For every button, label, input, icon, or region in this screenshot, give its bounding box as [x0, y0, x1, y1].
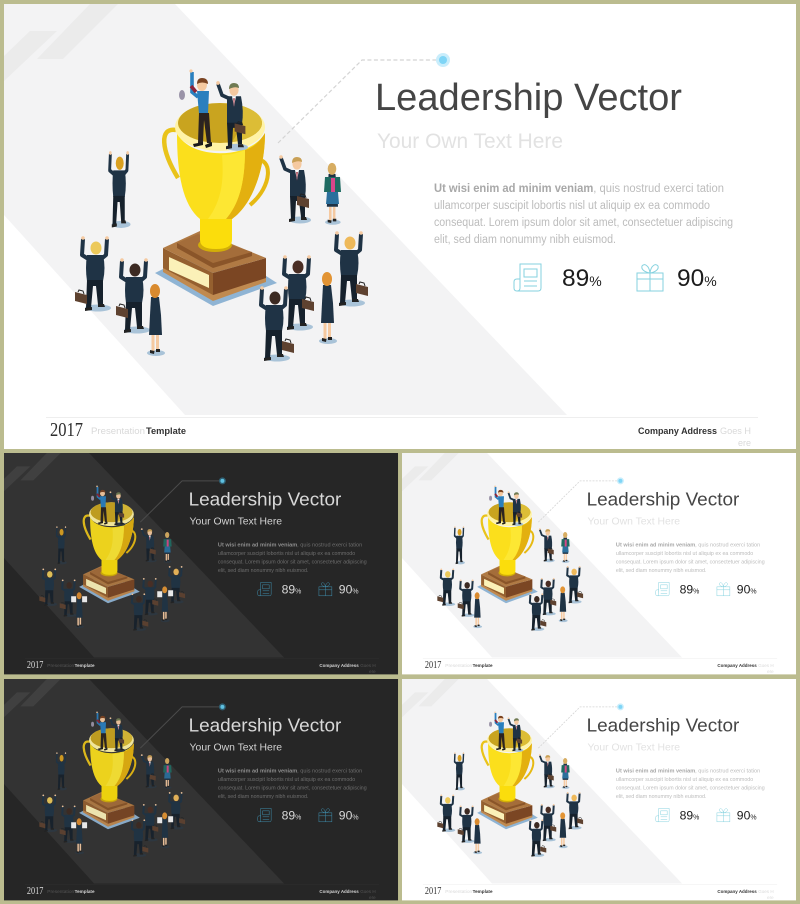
footer year: 2017	[27, 886, 43, 897]
diagonal band	[4, 4, 567, 415]
icon: newspaper	[514, 264, 541, 291]
person: woman with orange hair	[319, 272, 337, 344]
footer company address: ere	[369, 895, 376, 901]
illustration: trophy and cheering team	[75, 69, 368, 362]
footer company address: Goes H	[720, 426, 751, 437]
panel: dark slide top left	[4, 453, 398, 675]
body text: ullamcorper suscipit lobortis nisl ut aliquip ex ea commodo	[434, 200, 710, 212]
footer template label: Presentation	[445, 889, 473, 895]
footer company address: Goes H	[360, 663, 376, 669]
title: Leadership Vector	[189, 490, 341, 511]
diagonal band	[402, 453, 682, 657]
title: Leadership Vector	[375, 77, 682, 119]
body text: consequat. Lorem ipsum dolor sit amet, consectetuer adipiscing	[616, 785, 765, 791]
body text: consequat. Lorem ipsum dolor sit amet, consectetuer adipiscing	[218, 559, 367, 565]
body text: elit, sed diam nonummy nibh euismod.	[434, 234, 616, 246]
panel: light slide bottom right	[402, 679, 796, 901]
papers held by women	[71, 590, 173, 602]
footer company address: Company Address	[717, 889, 757, 895]
subtitle: Your Own Text Here	[190, 517, 282, 528]
body text: Ut wisi enim ad minim veniam, quis nostrud exerci tation	[616, 769, 760, 775]
panel: dark slide bottom left	[4, 679, 398, 901]
footer company address: ere	[767, 669, 774, 675]
footer company address	[638, 426, 751, 449]
subtitle: Your Own Text Here	[588, 517, 680, 528]
footer company address	[717, 663, 774, 675]
body text: elit, sed diam nonummy nibh euismod.	[218, 568, 309, 574]
stat: 89 percent: 89%	[680, 582, 699, 596]
slide background	[402, 453, 796, 674]
stat: 89 percent: 89%	[562, 265, 602, 292]
footer template label: Template	[75, 663, 95, 669]
slide background	[4, 4, 796, 449]
illustration	[437, 486, 583, 631]
subtitle: Your Own Text Here	[190, 743, 282, 754]
footer rule	[25, 883, 379, 886]
stat: 90 percent: 90%	[339, 808, 359, 822]
icon: gift	[637, 265, 663, 291]
connector dot	[617, 477, 624, 484]
papers held by women	[71, 816, 173, 828]
footer company address: ere	[369, 669, 376, 675]
dashed connector	[538, 481, 617, 522]
person: cheering colleague 6	[260, 286, 294, 362]
footer company address: Company Address	[717, 663, 757, 669]
subtitle: Your Own Text Here	[588, 743, 680, 754]
icon: gift	[319, 809, 332, 822]
person: leader in blue shirt with megaphone	[179, 69, 212, 148]
trophy	[155, 103, 277, 306]
footer rule	[46, 417, 758, 418]
icon: newspaper	[258, 808, 271, 822]
icon: gift	[717, 583, 730, 596]
footer year: 2017	[425, 660, 441, 671]
body text	[218, 769, 367, 800]
body text: ullamcorper suscipit lobortis nisl ut aliquip ex ea commodo	[616, 551, 753, 557]
body text: Ut wisi enim ad minim veniam, quis nostrud exerci tation	[218, 543, 362, 549]
body text: consequat. Lorem ipsum dolor sit amet, consectetuer adipiscing	[616, 559, 765, 565]
connector	[140, 707, 219, 748]
footer template label: Presentation	[445, 663, 473, 669]
title: Leadership Vector	[587, 716, 739, 737]
diagonal band	[402, 679, 682, 883]
person: cheering colleague 1	[109, 151, 131, 228]
footer template label: Presentation	[47, 889, 75, 895]
body text	[616, 769, 765, 800]
body text: Ut wisi enim ad minim veniam, quis nostrud exerci tation	[434, 183, 724, 195]
footer year: 2017	[425, 886, 441, 897]
dashed connector	[538, 707, 617, 748]
connector dot	[219, 477, 226, 484]
stat: 89 percent: 89%	[680, 808, 699, 822]
corner strips	[4, 453, 61, 491]
stat: 90 percent: 90%	[737, 808, 757, 822]
footer company address: Company Address	[319, 889, 359, 895]
stat: 89 percent: 89%	[282, 582, 301, 596]
illustration	[39, 712, 185, 857]
footer company address	[319, 663, 376, 675]
footer company address: ere	[767, 895, 774, 901]
person: cheering colleague 3	[116, 258, 150, 334]
body text: consequat. Lorem ipsum dolor sit amet, consectetuer adipiscing	[434, 217, 733, 229]
footer rule	[423, 657, 777, 660]
body text: elit, sed diam nonummy nibh euismod.	[616, 568, 707, 574]
corner strips	[4, 4, 118, 81]
person: cheering colleague 5	[283, 255, 314, 330]
footer company address	[717, 889, 774, 901]
footer template label: Template	[473, 663, 493, 669]
body text	[218, 543, 367, 574]
panel: main light slide	[4, 4, 796, 449]
person: woman with papers	[147, 284, 165, 356]
person: cheering colleague 2	[75, 236, 111, 312]
person: woman in teal	[324, 163, 341, 225]
footer company address	[319, 889, 376, 901]
stat: 90 percent: 90%	[339, 582, 359, 596]
icon: newspaper	[656, 808, 669, 822]
corner strips	[402, 453, 459, 491]
footer template label: Presentation	[91, 426, 145, 437]
body text: consequat. Lorem ipsum dolor sit amet, consectetuer adipiscing	[218, 785, 367, 791]
footer company address: Company Address	[638, 426, 717, 437]
footer year: 2017	[27, 660, 43, 671]
body text: Ut wisi enim ad minim veniam, quis nostrud exerci tation	[616, 543, 760, 549]
icon: newspaper	[656, 582, 669, 596]
stat: 90 percent: 90%	[677, 265, 717, 292]
body text: Ut wisi enim ad minim veniam, quis nostrud exerci tation	[218, 769, 362, 775]
body text: elit, sed diam nonummy nibh euismod.	[218, 794, 309, 800]
icon: gift	[717, 809, 730, 822]
subtitle: Your Own Text Here	[377, 130, 563, 153]
footer company address: Company Address	[319, 663, 359, 669]
icon: gift	[319, 583, 332, 596]
connector dot	[617, 703, 624, 710]
illustration	[437, 712, 583, 857]
body text: ullamcorper suscipit lobortis nisl ut aliquip ex ea commodo	[218, 777, 355, 783]
slide background	[4, 679, 398, 900]
diagonal band	[4, 679, 284, 883]
footer year: 2017	[50, 419, 83, 441]
title: Leadership Vector	[189, 716, 341, 737]
person: cheering colleague 4	[335, 231, 368, 306]
connector dot	[436, 53, 450, 67]
footer rule	[423, 883, 777, 886]
footer company address: Goes H	[360, 889, 376, 895]
footer company address: ere	[738, 438, 751, 449]
icon: newspaper	[258, 582, 271, 596]
footer template label: Presentation	[47, 663, 75, 669]
diagonal band	[4, 453, 284, 657]
title: Leadership Vector	[587, 490, 739, 511]
footer rule	[25, 657, 379, 660]
corner strips	[4, 679, 61, 717]
illustration	[39, 486, 185, 631]
footer company address: Goes H	[758, 663, 774, 669]
body text	[434, 183, 733, 246]
body text	[616, 543, 765, 574]
footer template label: Template	[146, 426, 186, 437]
stat: 90 percent: 90%	[737, 582, 757, 596]
slide background	[4, 453, 398, 674]
footer template label: Template	[75, 889, 95, 895]
stat: 89 percent: 89%	[282, 808, 301, 822]
corner strips	[402, 679, 459, 717]
connector dot	[219, 703, 226, 710]
footer company address: Goes H	[758, 889, 774, 895]
person: leader in dark suit with briefcase	[216, 81, 248, 151]
body text: elit, sed diam nonummy nibh euismod.	[616, 794, 707, 800]
connector	[140, 481, 219, 522]
body text: ullamcorper suscipit lobortis nisl ut aliquip ex ea commodo	[218, 551, 355, 557]
panel: light slide top right	[402, 453, 796, 675]
slide background	[402, 679, 796, 900]
dashed connector	[278, 60, 437, 143]
footer template label: Template	[473, 889, 493, 895]
person: man in suit with briefcase	[279, 155, 311, 224]
body text: ullamcorper suscipit lobortis nisl ut aliquip ex ea commodo	[616, 777, 753, 783]
